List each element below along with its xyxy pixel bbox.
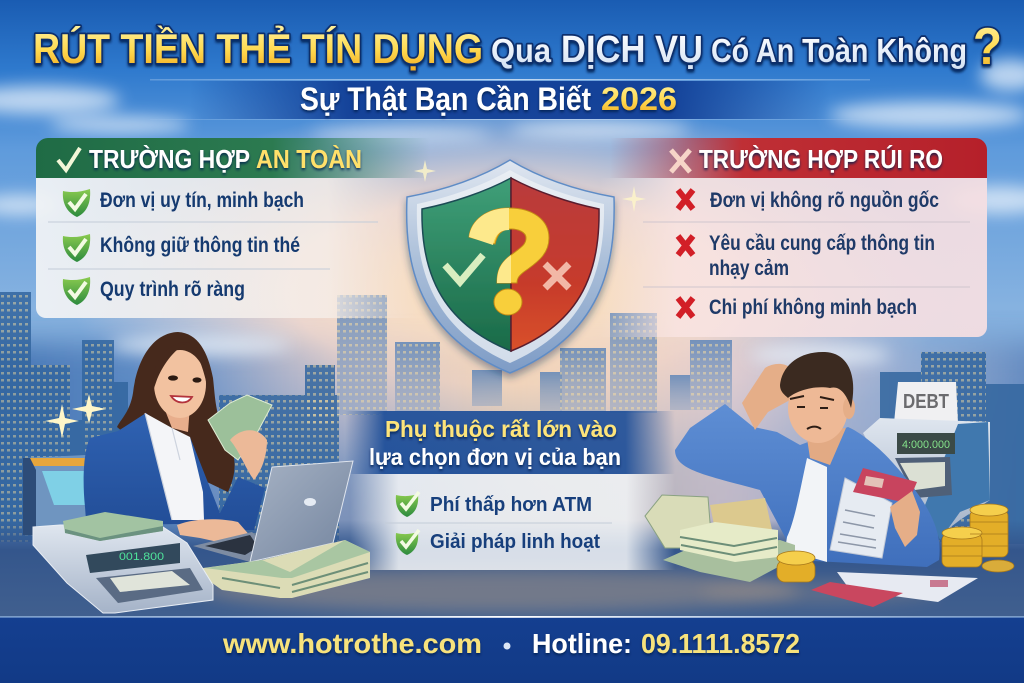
neck [806, 428, 846, 465]
risk item 2: nhạy cảm [709, 257, 789, 280]
face [788, 373, 848, 443]
benefit 2: Giải pháp linh hoạt [430, 531, 600, 553]
panel: depends on your choice [345, 411, 675, 570]
icon: check shield 2 [63, 234, 90, 262]
facial features [790, 396, 834, 429]
callout heading: Phụ thuộc rất lớn vào [385, 416, 617, 442]
illustration: worried man [675, 352, 940, 567]
footer bar [0, 616, 1024, 683]
counter display reading: 001.800 [119, 551, 164, 563]
debt label: DEBT [903, 391, 949, 413]
laptop screen [250, 461, 353, 562]
holding hand [890, 491, 920, 547]
face [153, 342, 207, 432]
illustration: back machine left [23, 455, 86, 535]
panel: safe cases [36, 138, 430, 318]
illustration: money stacks left [203, 540, 370, 598]
shirt body and arm [675, 404, 940, 567]
risk item 3: Chi phí không minh bạch [709, 296, 917, 319]
subtitle band: Sự Thật Bạn Cần Biết [300, 81, 591, 117]
separator dot [504, 642, 510, 650]
illustration: woman with laptop [84, 332, 353, 562]
risk panel heading [610, 138, 987, 178]
icon: check shield 1 [63, 189, 90, 217]
hotline label: Hotline: [532, 628, 632, 659]
shirt [145, 413, 204, 520]
risk item 1: Đơn vị không rõ nguồn gốc [710, 189, 939, 212]
typing hand [177, 519, 252, 546]
illustration: cash pile right [645, 495, 795, 582]
safe panel heading [36, 138, 430, 178]
icon: red cross 3 [678, 298, 693, 317]
hair [780, 352, 853, 408]
hand with cash [230, 430, 267, 480]
main title: Qua [491, 32, 552, 69]
sparkles [45, 160, 646, 438]
main title: DỊCH VỤ [561, 29, 703, 71]
machine display reading: 4:000.000 [902, 439, 950, 451]
safe panel heading: TRƯỜNG HỢP [89, 144, 250, 174]
laptop base [193, 532, 268, 562]
cash fan [208, 395, 272, 460]
icon: check shield 3 [63, 277, 90, 305]
icon: red cross 2 [678, 236, 693, 255]
icon: check 1 [396, 492, 419, 517]
benefit 1: Phí thấp hơn ATM [430, 494, 592, 516]
callout heading: lựa chọn đơn vị của bạn [369, 444, 621, 470]
main title: RÚT TIỀN THẺ TÍN DỤNG [33, 24, 483, 72]
hair [117, 332, 235, 492]
icon: red cross 1 [678, 190, 693, 209]
subtitle band: 2026 [601, 81, 677, 117]
illustration: documents on desk [811, 572, 978, 607]
hotline number: 09.1111.8572 [641, 628, 800, 659]
red card [853, 468, 917, 503]
risk panel heading: TRƯỜNG HỢP RÚI RO [699, 144, 943, 174]
subtitle band [150, 79, 870, 120]
icon: check 2 [396, 530, 419, 555]
main title: ? [973, 18, 1002, 76]
safe item 3: Quy trình rõ ràng [100, 278, 245, 301]
main title [33, 18, 1002, 76]
illustration: gold coins [777, 504, 1014, 582]
jacket [84, 413, 265, 530]
illustration: bill counter left [33, 512, 213, 613]
risk item 2: Yêu cầu cung cấp thông tin [709, 232, 935, 255]
main title: Có An Toàn Không [711, 32, 967, 69]
paper [830, 478, 892, 558]
forearm hand on head [742, 364, 795, 430]
icon: central shield with question mark [407, 160, 614, 373]
safe item 2: Không giữ thông tin thé [100, 234, 300, 257]
question mark [469, 208, 549, 315]
t-shirt [785, 458, 827, 562]
illustration: back machine right [863, 382, 990, 540]
website: www.hotrothe.com [222, 628, 482, 659]
safe panel heading: AN TOÀN [256, 144, 362, 174]
safe item 1: Đơn vị uy tín, minh bạch [100, 189, 304, 212]
panel: risk cases [600, 138, 987, 337]
callout heading [369, 416, 621, 470]
